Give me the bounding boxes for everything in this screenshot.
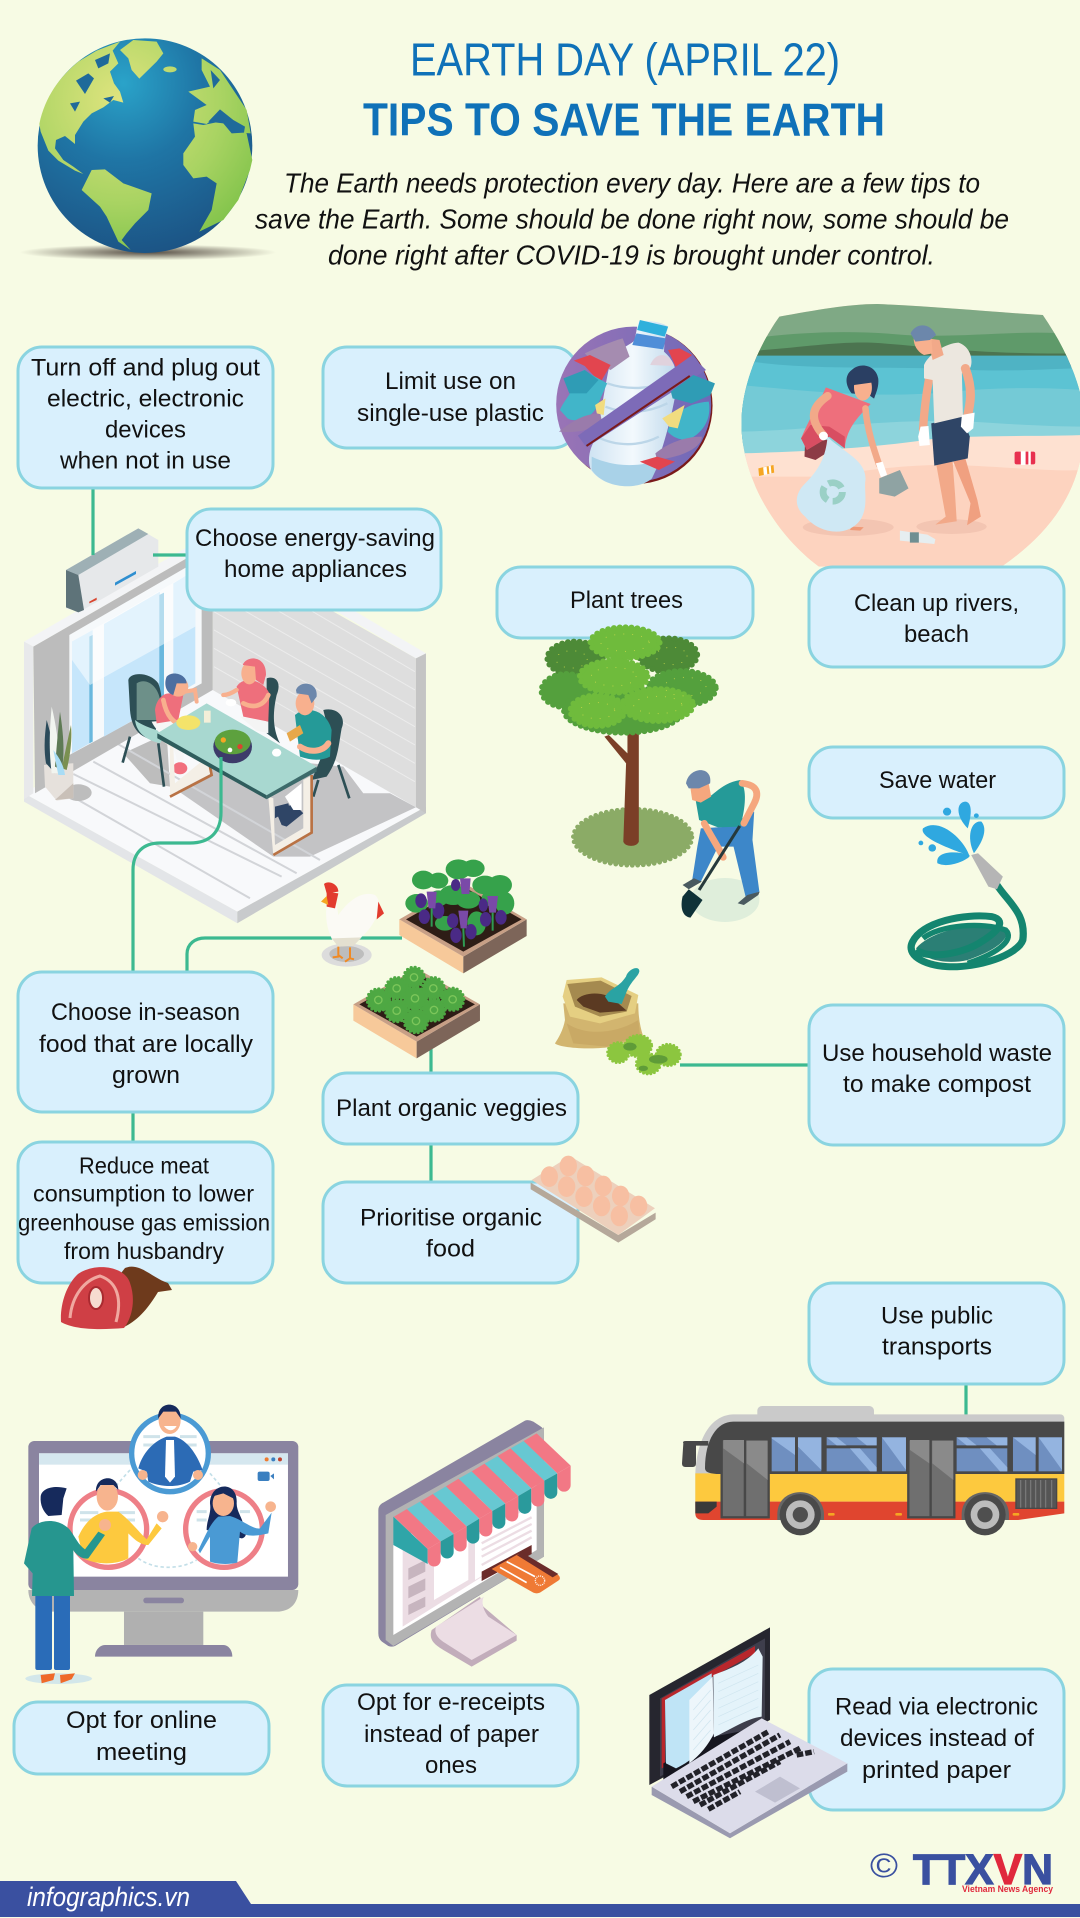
tip: limit plastic: single-use plastic — [357, 400, 544, 427]
tip: compost: Use household waste — [822, 1040, 1052, 1067]
tip: turn off devices: when not in use — [59, 448, 231, 474]
air conditioner — [66, 528, 158, 612]
screen — [378, 1420, 544, 1647]
tip: e-receipts — [323, 1685, 578, 1786]
footer bar — [0, 1881, 1080, 1917]
tip: compost: to make compost — [843, 1071, 1031, 1098]
tip: online meeting: meeting — [96, 1739, 187, 1766]
man at table — [275, 684, 332, 827]
illustration: tree — [542, 627, 716, 865]
illustration: eggplant crate and chicken — [321, 859, 527, 973]
illustration: compost sack — [555, 968, 680, 1074]
tip: limit plastic: Limit use on — [385, 368, 516, 395]
tip: read electronically: devices instead of — [840, 1725, 1034, 1752]
book — [665, 1648, 763, 1768]
illustration: man digging — [682, 770, 760, 922]
tip: plant trees: Plant trees — [570, 587, 683, 614]
title: TIPS TO SAVE THE EARTH — [363, 94, 885, 146]
illustration: laptop with book — [649, 1627, 847, 1838]
logo: TTXVN: © — [870, 1847, 898, 1885]
woman — [801, 365, 894, 536]
girl — [152, 674, 197, 774]
chicken — [321, 882, 384, 967]
tip: energy saving appliances: Choose energy-saving — [195, 525, 435, 552]
tip: reduce meat: Reduce meat — [79, 1152, 210, 1178]
receipt slot and card — [482, 1545, 560, 1593]
litter — [758, 451, 1035, 544]
tip: reduce meat: consumption to lower — [33, 1180, 254, 1206]
eggplant crate — [399, 859, 527, 973]
screen — [649, 1627, 770, 1785]
tip: organic food: food — [426, 1236, 475, 1262]
logo: TTXVN: Vietnam News Agency — [962, 1884, 1054, 1895]
tip: e-receipts: instead of paper — [364, 1721, 539, 1748]
caller: man in yellow — [70, 1478, 168, 1567]
tip: read electronically: printed paper — [862, 1757, 1011, 1784]
awning — [393, 1433, 571, 1566]
tip: online meeting — [14, 1702, 269, 1774]
tip: public transport: Use public — [881, 1302, 993, 1330]
monitor — [28, 1441, 298, 1657]
tip: e-receipts: ones — [425, 1752, 477, 1779]
icon: meat — [61, 1267, 172, 1329]
intro text: done right after COVID-19 is brought under control. — [328, 240, 935, 270]
grille — [1016, 1479, 1057, 1508]
tip: public transport: transports — [882, 1334, 992, 1360]
tip: limit plastic — [323, 347, 577, 448]
stand — [431, 1597, 517, 1667]
tip: clean up: Clean up rivers, — [854, 590, 1019, 617]
tip: reduce meat — [18, 1142, 273, 1283]
caller: woman — [186, 1486, 276, 1567]
tip: plant trees — [497, 567, 753, 638]
tip: organic food: Prioritise organic — [360, 1204, 542, 1232]
tip: read electronically: Read via electronic — [835, 1694, 1038, 1720]
tip: organic veggies: Plant organic veggies — [336, 1095, 567, 1122]
tip: in-season food: food that are locally — [39, 1031, 254, 1058]
tip: reduce meat: from husbandry — [64, 1238, 224, 1264]
tip: turn off devices — [18, 347, 273, 488]
man — [911, 325, 987, 534]
tip: in-season food: Choose in-season — [51, 999, 240, 1026]
keyboard base — [652, 1718, 847, 1838]
doors — [722, 1439, 954, 1517]
tip: public transport — [809, 1283, 1064, 1384]
illustration: family dining room — [24, 528, 426, 923]
floor slab — [24, 687, 426, 923]
tip: organic veggies — [323, 1073, 578, 1144]
title: EARTH DAY (APRIL 22) — [410, 34, 840, 86]
icon: no single-use plastic — [556, 320, 715, 486]
tip: clean up — [809, 567, 1064, 667]
window wall — [24, 533, 223, 799]
wheels — [777, 1492, 1009, 1535]
tip: online meeting: Opt for online — [66, 1707, 217, 1734]
caller: man with tie — [132, 1405, 208, 1492]
tip: energy saving appliances: home appliances — [224, 556, 407, 583]
windows — [772, 1437, 1062, 1471]
connector lines — [93, 488, 966, 1416]
tip: save water — [809, 747, 1064, 818]
tip: compost — [809, 1005, 1064, 1145]
viewer — [24, 1487, 111, 1684]
intro text: The Earth needs protection every day. Here are a few tips to — [284, 168, 980, 198]
plant — [44, 707, 92, 801]
illustration: beach clean-up — [740, 300, 1080, 570]
tip: save water: Save water — [879, 767, 996, 794]
tip: energy saving appliances — [187, 509, 441, 610]
intro text — [255, 168, 1009, 270]
illustration: online meeting — [24, 1405, 298, 1684]
footer bar: infographics.vn — [27, 1882, 190, 1912]
icon: globe — [20, 38, 276, 260]
tip: in-season food: grown — [112, 1062, 180, 1089]
tip: organic food — [323, 1182, 578, 1283]
rubbish bag — [797, 432, 909, 532]
tip: e-receipts: Opt for e-receipts — [357, 1689, 545, 1716]
illustration: bus — [682, 1406, 1064, 1535]
illustration: water hose — [911, 802, 1023, 967]
tip: reduce meat: greenhouse gas emission — [18, 1210, 270, 1236]
illustration: lettuce crate — [353, 967, 480, 1058]
tip: read electronically — [809, 1669, 1064, 1810]
chairs — [123, 674, 349, 798]
illustration: egg tray — [531, 1156, 656, 1243]
tip: turn off devices: devices — [105, 416, 186, 444]
woman at table — [223, 658, 269, 733]
brick wall — [213, 533, 426, 813]
tip: turn off devices: Turn off and plug out — [31, 354, 260, 382]
logo: TTXVN: TTXVN — [913, 1846, 1053, 1894]
title — [363, 34, 885, 146]
tip: turn off devices: electric, electronic — [47, 386, 244, 412]
tip: clean up: beach — [904, 621, 969, 648]
intro text: save the Earth. Some should be done right now, some should be — [255, 204, 1009, 234]
illustration: online shop monitor — [378, 1420, 571, 1667]
table — [157, 699, 317, 856]
tip: in-season food — [18, 972, 273, 1112]
